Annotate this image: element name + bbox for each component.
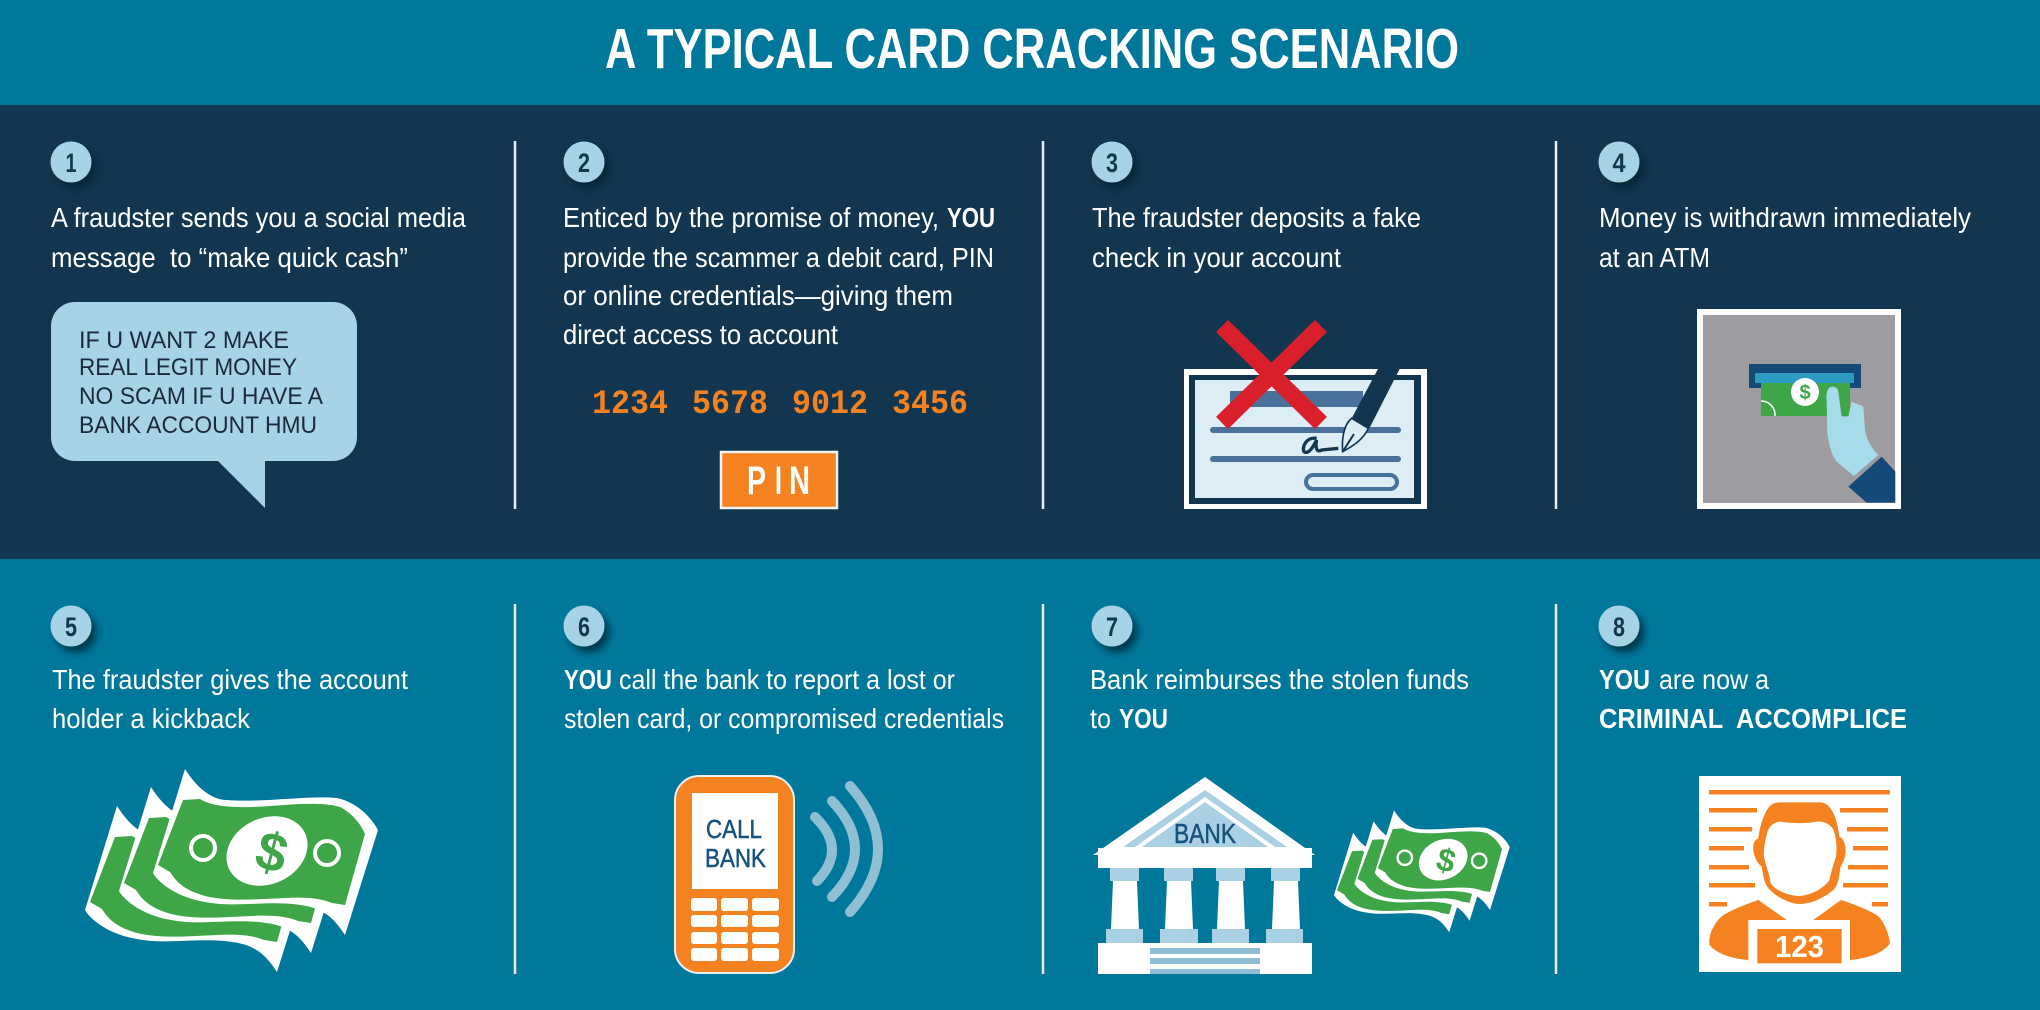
- PIN box: I: [775, 459, 782, 503]
- step number 4: [1598, 142, 1640, 182]
- icon: stack of money: $: [249, 820, 294, 885]
- icon: reimbursed money: [1334, 810, 1510, 932]
- step 2 text: provide the scammer a debit card, PIN: [563, 242, 994, 273]
- step number 5: [50, 606, 92, 646]
- step number 7: [1092, 606, 1132, 646]
- panel: top row background: [0, 105, 2040, 559]
- step 6 text: stolen card, or compromised credentials: [564, 703, 1004, 734]
- step number 1: [50, 142, 92, 182]
- panel: step 7: [1090, 606, 1510, 974]
- step 5 text: holder a kickback: [52, 703, 251, 734]
- step 7 text: Bank reimburses the stolen funds: [1090, 664, 1469, 695]
- step 8 text: CRIMINAL ACCOMPLICE: [1599, 703, 1907, 734]
- card number: 1234: [592, 386, 668, 424]
- step number 2: 2: [578, 148, 590, 178]
- step 2 text: [563, 202, 995, 350]
- step 7 text: to: [1090, 703, 1111, 734]
- icon: signal waves: [815, 786, 878, 912]
- card number: 9012: [792, 386, 868, 424]
- panel: step 5: [50, 606, 408, 972]
- speech bubble: IF U WANT 2 MAKE: [79, 327, 289, 354]
- step 1 text: [51, 202, 466, 273]
- speech bubble: NO SCAM IF U HAVE A: [79, 383, 323, 410]
- icon: stack of money: [85, 769, 378, 972]
- step 1 text: A fraudster sends you a social media: [51, 202, 466, 233]
- step number 7: 7: [1106, 612, 1118, 642]
- PIN box: P: [747, 459, 766, 503]
- icon: reimbursed money: $: [1433, 841, 1459, 880]
- step number 8: [1598, 606, 1640, 646]
- icon: fake check: [1184, 326, 1427, 509]
- step 3 text: The fraudster deposits a fake: [1092, 202, 1421, 233]
- title: A TYPICAL CARD CRACKING SCENARIO: [605, 17, 1459, 81]
- icon: ATM withdrawal: $: [1799, 382, 1811, 404]
- panel: step 1: [50, 142, 466, 508]
- step 2 text: direct access to account: [563, 319, 838, 350]
- step 2 text: or online credentials—giving them: [563, 280, 953, 311]
- PIN box: [721, 452, 837, 508]
- icon: phone: BANK: [705, 843, 767, 873]
- step 4 text: [1599, 202, 1971, 273]
- card number: 5678: [692, 386, 768, 424]
- step 6 text: call the bank to report a lost or: [619, 664, 955, 695]
- step 3 text: check in your account: [1092, 242, 1341, 273]
- speech bubble: REAL LEGIT MONEY: [79, 354, 297, 381]
- step 4 text: Money is withdrawn immediately: [1599, 202, 1971, 233]
- step number 2: [564, 142, 604, 182]
- step 6 text: YOU: [564, 664, 612, 695]
- card number: [592, 386, 968, 424]
- step 5 text: The fraudster gives the account: [52, 664, 408, 695]
- step number 3: 3: [1106, 148, 1118, 178]
- icon: bank building: [1093, 777, 1315, 974]
- speech bubble: BANK ACCOUNT HMU: [79, 412, 317, 439]
- step 6 text: [564, 664, 1004, 734]
- icon: mugshot: 123: [1775, 929, 1824, 964]
- step number 1: 1: [66, 148, 76, 178]
- icon: mugshot: [1699, 776, 1901, 972]
- step 4 text: at an ATM: [1599, 242, 1710, 273]
- speech bubble: [51, 302, 357, 508]
- icon: phone: [675, 776, 878, 973]
- step 1 text: message to “make quick cash”: [51, 242, 408, 273]
- panel: step 3: [1092, 142, 1427, 509]
- step number 6: [564, 606, 604, 646]
- step 2 text: Enticed by the promise of money,: [563, 202, 939, 233]
- step number 6: 6: [578, 612, 590, 642]
- icon: ATM withdrawal: [1697, 309, 1901, 509]
- step 3 text: [1092, 202, 1421, 273]
- panel: step 2: [563, 142, 995, 508]
- step 2 text: YOU: [947, 202, 995, 233]
- step number 5: 5: [65, 612, 77, 642]
- step 8 text: YOU: [1599, 664, 1650, 695]
- step number 8: 8: [1613, 612, 1625, 642]
- icon: bank building: BANK: [1174, 818, 1236, 849]
- card number: 3456: [892, 386, 968, 424]
- step number 3: [1092, 142, 1132, 182]
- panel: step 6: [564, 606, 1004, 973]
- step 7 text: [1090, 664, 1469, 734]
- step 8 text: [1599, 664, 1907, 734]
- icon: phone: CALL: [706, 814, 762, 844]
- panel: step 4: [1598, 142, 1971, 509]
- step number 4: 4: [1612, 148, 1626, 178]
- panel: step 8: [1598, 606, 1907, 972]
- step 7 text: YOU: [1119, 703, 1168, 734]
- step 8 text: are now a: [1659, 664, 1769, 695]
- PIN box: N: [789, 459, 810, 503]
- step 5 text: [52, 664, 408, 734]
